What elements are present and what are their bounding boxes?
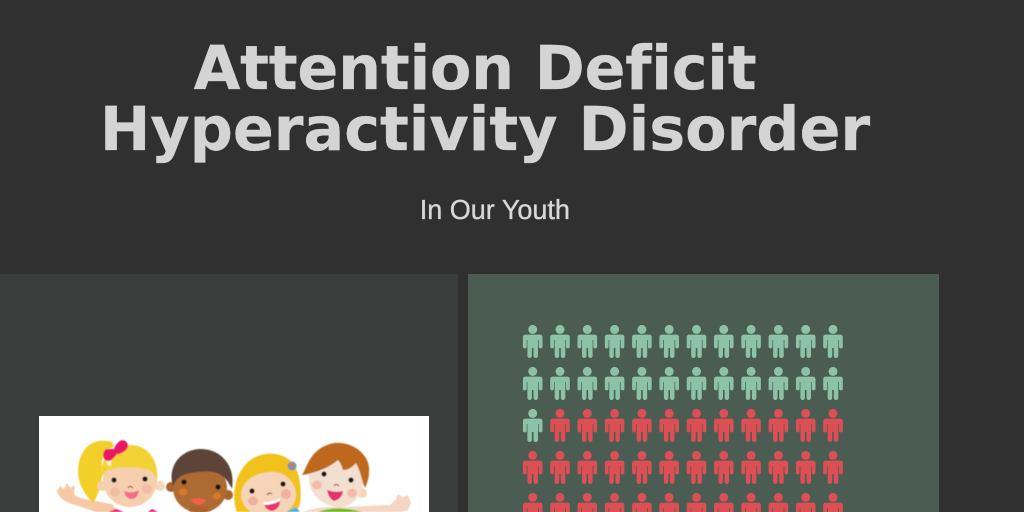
panel: children image bbox=[0, 274, 458, 512]
row 3 bbox=[523, 409, 843, 442]
left waving arm bbox=[57, 483, 118, 512]
row 2 bbox=[523, 367, 843, 400]
right waving arm bbox=[302, 494, 411, 512]
illustration: four smiling children bbox=[39, 416, 429, 512]
subtitle: In Our Youth bbox=[420, 194, 570, 225]
row 4 bbox=[523, 451, 843, 484]
row 1 bbox=[523, 325, 843, 358]
pictogram chart: green and red people bbox=[522, 324, 843, 512]
girl one bbox=[78, 440, 165, 512]
row 5 bbox=[523, 493, 843, 512]
girl two bbox=[234, 454, 301, 512]
boy dark bbox=[166, 449, 233, 512]
title bbox=[100, 34, 870, 165]
boy brown hair bbox=[302, 443, 369, 512]
panel: pictogram bbox=[468, 274, 939, 512]
title: Hyperactivity Disorder bbox=[100, 95, 870, 165]
title: Attention Deficit bbox=[194, 34, 756, 104]
